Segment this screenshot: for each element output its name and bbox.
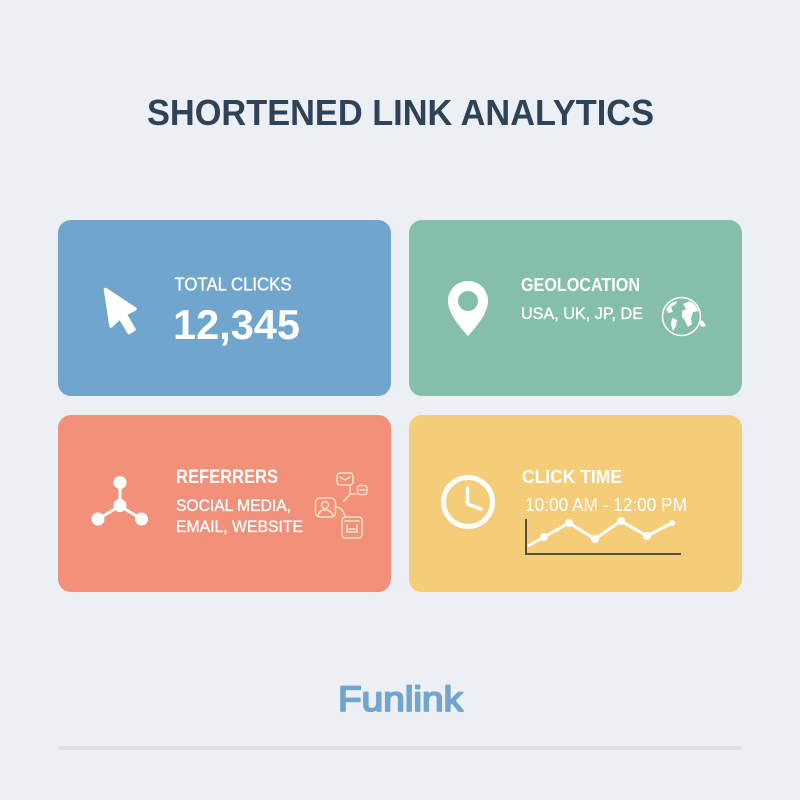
panel: geolocation xyxy=(409,220,742,396)
total clicks label: TOTAL CLICKS xyxy=(174,274,292,294)
icon: referrer sources cluster xyxy=(316,473,367,538)
panel: referrers xyxy=(58,415,391,592)
referrers sources xyxy=(176,496,303,536)
geolocation heading: GEOLOCATION xyxy=(521,275,640,295)
icon: globe xyxy=(662,298,706,336)
click time heading: CLICK TIME xyxy=(522,466,622,487)
icon: map pin xyxy=(448,281,488,336)
logo: Funlink: Funlink xyxy=(338,680,464,719)
referrers sources: SOCIAL MEDIA, xyxy=(176,496,291,515)
click time range: 10:00 AM - 12:00 PM xyxy=(525,495,687,515)
total clicks value: 12,345 xyxy=(173,301,300,348)
panel: click time xyxy=(409,415,742,592)
referrers sources: EMAIL, WEBSITE xyxy=(176,517,303,536)
line chart xyxy=(526,517,681,554)
icon: clock xyxy=(444,478,492,526)
panel: total clicks xyxy=(58,220,391,396)
referrers heading: REFERRERS xyxy=(176,467,278,488)
icon: network xyxy=(92,476,148,526)
icon: cursor xyxy=(106,290,135,332)
geolocation countries: USA, UK, JP, DE xyxy=(521,304,643,323)
title: SHORTENED LINK ANALYTICS xyxy=(147,92,654,133)
